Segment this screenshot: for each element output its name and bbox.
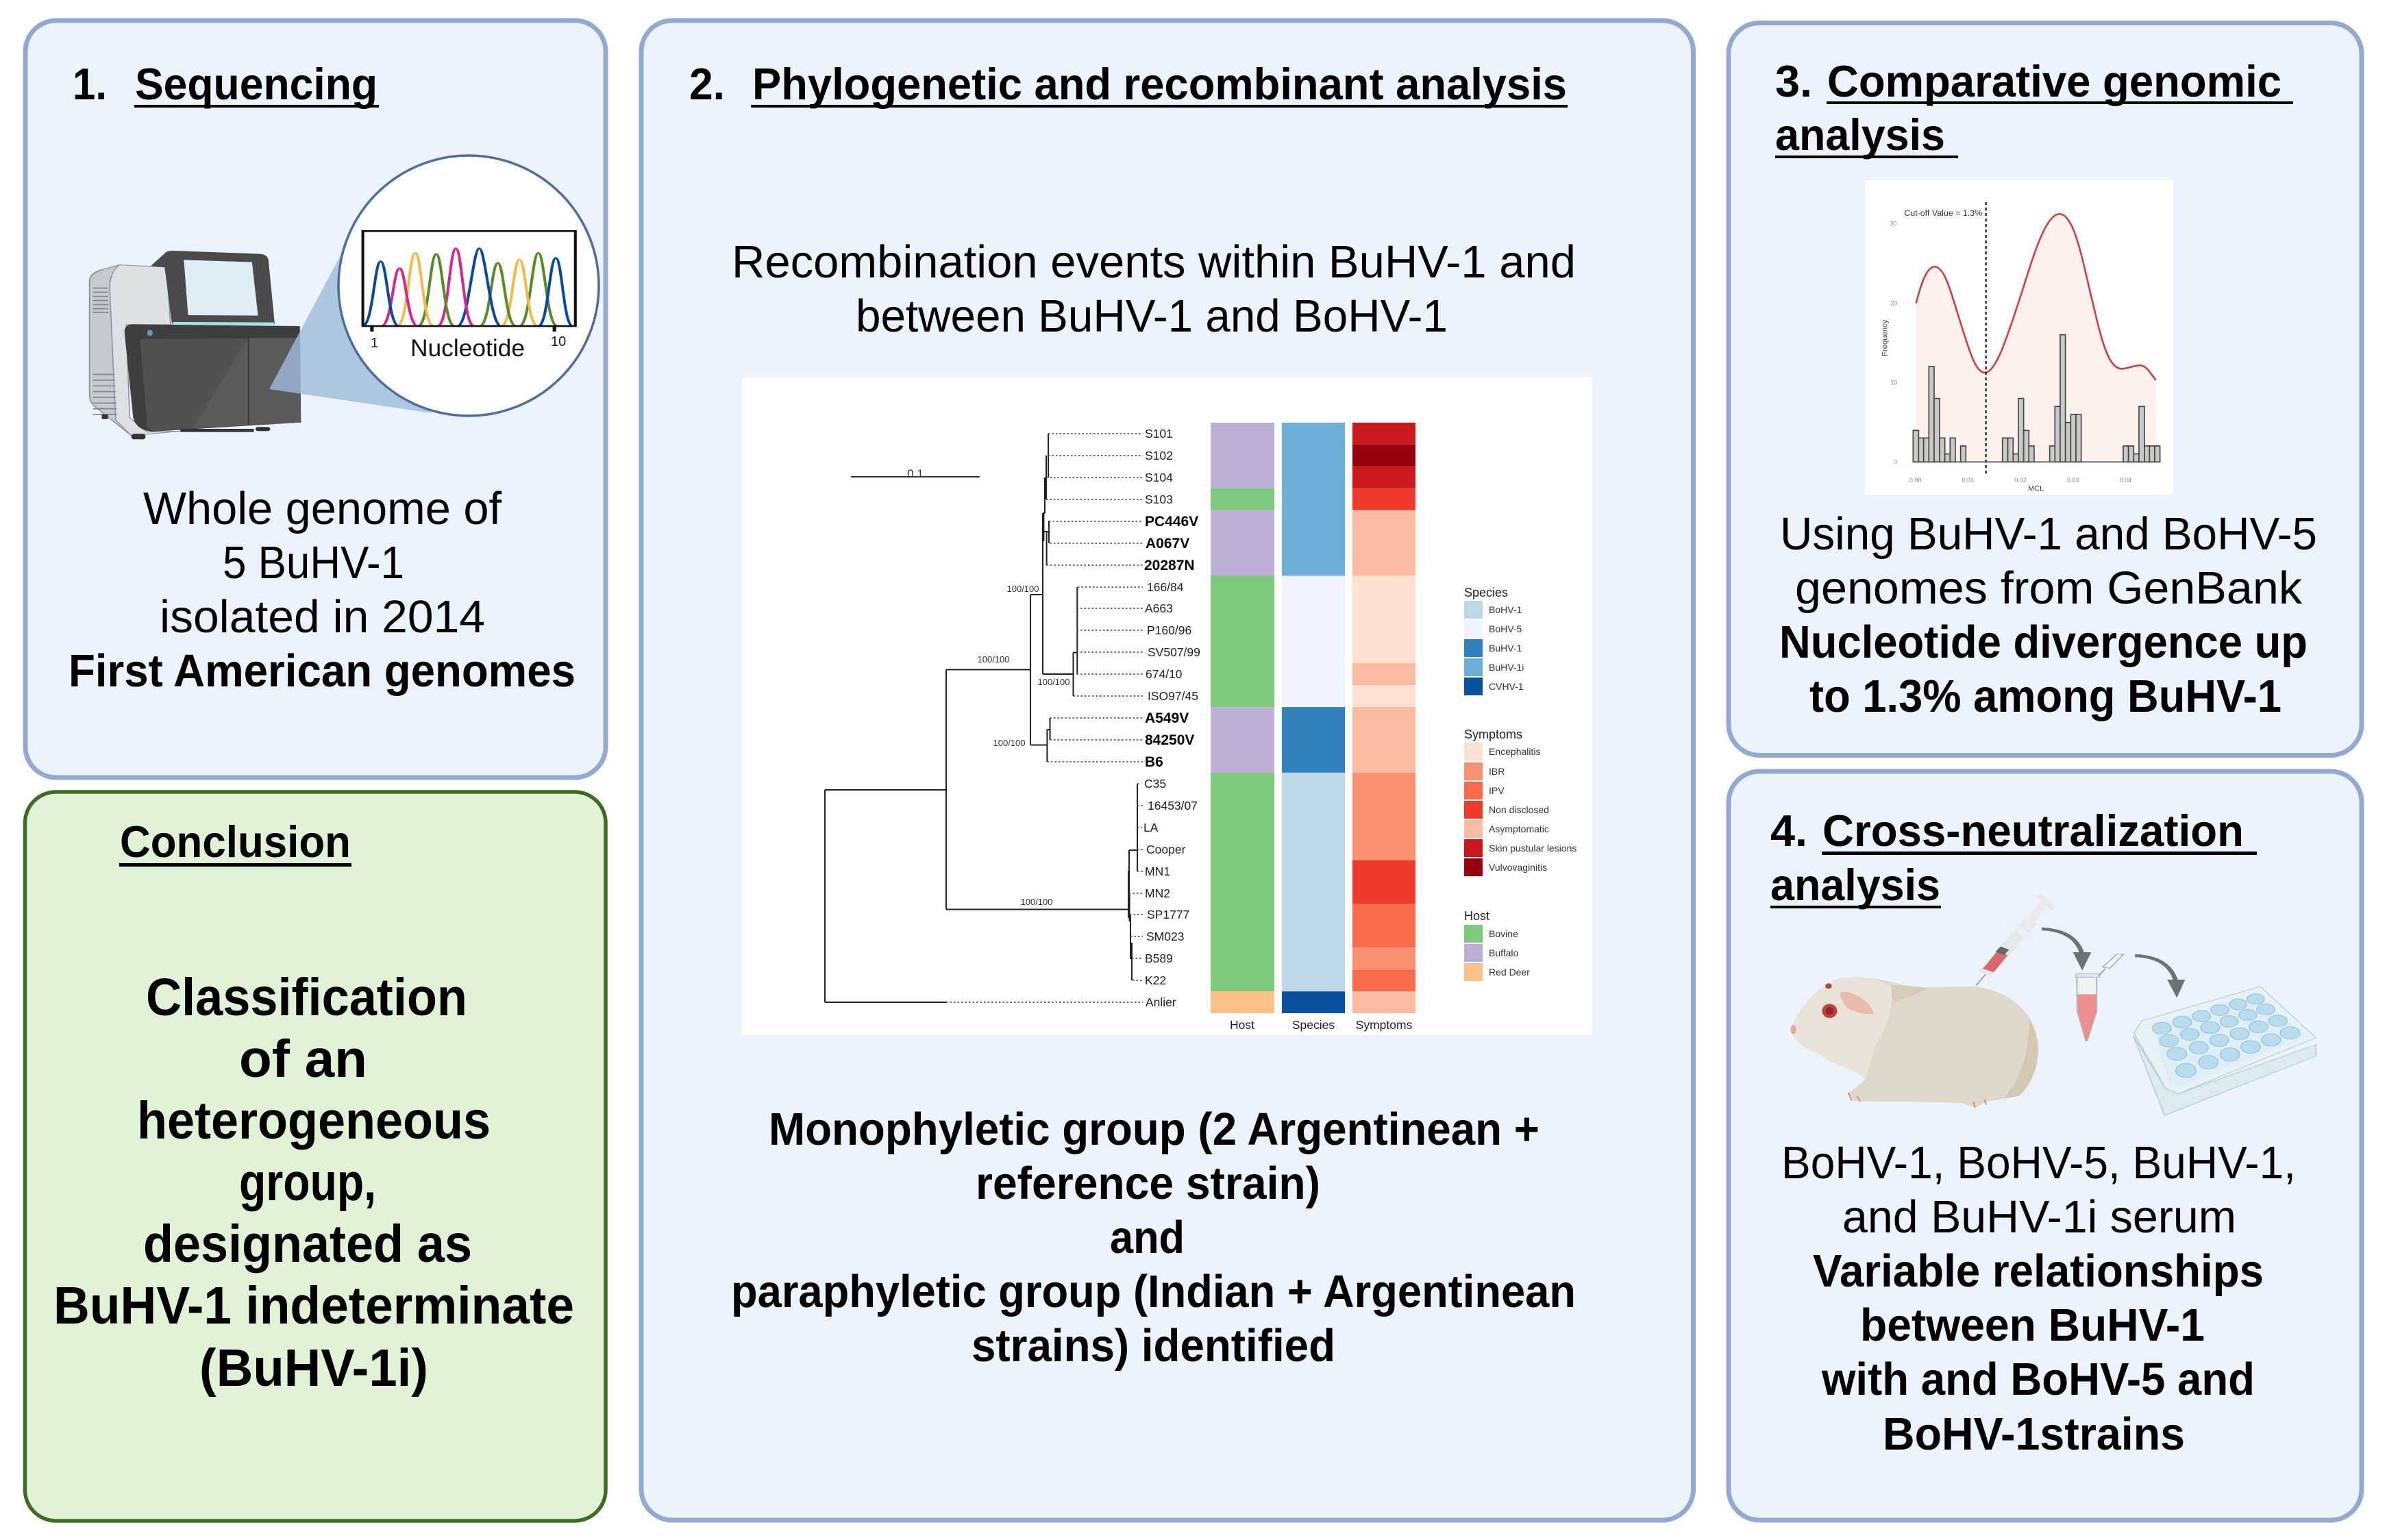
- text: cross-neutralization findings: with and BoHV-5 and: [1821, 1354, 2255, 1405]
- support values: 100/100: [1007, 584, 1039, 594]
- strain labels: S104: [1145, 471, 1173, 484]
- chart: nucleotide divergence histogram: 10: [1890, 379, 1897, 386]
- heading: sequencing: 1.: [73, 59, 107, 109]
- text: cross-neutralization findings: Variable relationships: [1813, 1245, 2264, 1297]
- strain labels: S101: [1145, 427, 1173, 440]
- legend: host: Buffalo: [1489, 947, 1519, 958]
- text: conclusion statement: group,: [239, 1153, 376, 1212]
- legend: host: Host: [1464, 909, 1489, 923]
- heading: phylogenetic: Phylogenetic and recombinant analysis: [752, 59, 1567, 109]
- text: conclusion statement: [53, 968, 574, 1398]
- text: comparative genomic findings: Nucleotide divergence up: [1779, 617, 2308, 668]
- chart: nucleotide divergence histogram: MCL: [2028, 485, 2044, 493]
- text: sequencing summary: isolated in 2014: [160, 591, 485, 643]
- text: phylogenetic conclusions: reference strain): [976, 1158, 1320, 1209]
- icon: magnifying circle with chromatogram: [269, 156, 599, 416]
- legend: symptoms: Encephalitis: [1489, 746, 1540, 757]
- strain labels: SV507/99: [1148, 645, 1200, 659]
- text: phylogenetic conclusions: Monophyletic group (2 Argentinean +: [769, 1104, 1539, 1155]
- chart: nucleotide divergence histogram: [1865, 180, 2173, 495]
- legend: host: [1464, 909, 1530, 981]
- arrow: syringe to tube: [2042, 929, 2091, 971]
- strain labels: MN2: [1145, 886, 1170, 900]
- panel: cross-neutralization analysis: [1729, 771, 2362, 1520]
- strain labels: A549V: [1145, 710, 1189, 726]
- text: recombination events: Recombination events within BuHV-1 and: [732, 236, 1576, 288]
- text: phylogenetic conclusions: and: [1110, 1212, 1185, 1263]
- heading: cross-neutralization: [1770, 806, 2257, 910]
- text: comparative genomic findings: [1779, 508, 2317, 722]
- text: cross-neutralization findings: BoHV-1strains: [1883, 1408, 2185, 1460]
- strain labels: A067V: [1146, 536, 1189, 551]
- strain labels: MN1: [1145, 865, 1170, 878]
- strain labels: ISO97/45: [1148, 689, 1198, 703]
- legend: species: BoHV-1: [1489, 604, 1522, 615]
- heatmap axis labels: Symptoms: [1356, 1018, 1413, 1032]
- strain labels: P160/96: [1147, 623, 1191, 637]
- chart: nucleotide divergence histogram: 30: [1890, 220, 1896, 227]
- heading: conclusion: Conclusion: [120, 817, 351, 867]
- strain labels: 84250V: [1145, 732, 1194, 748]
- heatmap column: host: [1211, 423, 1274, 1013]
- panel: conclusion: [25, 792, 606, 1521]
- icon: syringe: [1976, 895, 2053, 985]
- legend: symptoms: Asymptomatic: [1489, 823, 1549, 834]
- heatmap column: symptoms: [1352, 423, 1415, 1013]
- heatmap column: species: [1282, 423, 1345, 1013]
- strain labels: 166/84: [1147, 580, 1184, 594]
- chart: nucleotide divergence histogram: 0.01: [1962, 477, 1974, 484]
- strain labels: PC446V: [1145, 514, 1198, 530]
- strain labels: LA: [1143, 821, 1159, 834]
- text: conclusion statement: designated as: [143, 1215, 472, 1274]
- strain labels: Cooper: [1146, 843, 1186, 856]
- text: recombination events: [732, 236, 1576, 342]
- panel: sequencing: [25, 21, 606, 778]
- support values: 100/100: [1037, 677, 1070, 687]
- heatmap axis labels: Host: [1230, 1018, 1254, 1032]
- legend: species: CVHV-1: [1489, 681, 1524, 692]
- strain labels: [1143, 427, 1200, 1009]
- heading: cross-neutralization: 4.: [1770, 806, 1807, 856]
- strain labels: 20287N: [1144, 558, 1195, 573]
- legend: species: BoHV-5: [1489, 623, 1522, 634]
- text: cross-neutralization findings: BoHV-1, BoHV-5, BuHV-1,: [1781, 1137, 2296, 1189]
- heatmap axis labels: Species: [1292, 1018, 1335, 1032]
- legend: symptoms: IPV: [1489, 785, 1505, 796]
- strain labels: S103: [1145, 493, 1173, 506]
- strain labels: C35: [1144, 777, 1166, 791]
- text: phylogenetic conclusions: paraphyletic group (Indian + Argentinean: [731, 1266, 1576, 1317]
- text: sequencing summary: 5 BuHV-1: [223, 537, 404, 588]
- icon: magnifying circle with chromatogram: 1: [371, 336, 378, 351]
- legend: symptoms: IBR: [1489, 766, 1505, 777]
- icon: sequencing machine: [90, 251, 301, 439]
- panel: phylogenetic and recombinant analysis: [641, 21, 1694, 1520]
- text: cross-neutralization findings: [1781, 1137, 2296, 1460]
- support values: 100/100: [993, 738, 1025, 748]
- text: comparative genomic findings: Using BuHV-1 and BoHV-5: [1780, 508, 2317, 560]
- heading: comparative genomic: Comparative genomic: [1827, 56, 2281, 106]
- strain labels: S102: [1145, 449, 1173, 462]
- strain labels: 674/10: [1146, 667, 1183, 681]
- text: cross-neutralization findings: between BuHV-1: [1860, 1300, 2205, 1351]
- legend: symptoms: Vulvovaginitis: [1489, 862, 1547, 873]
- legend: host: Red Deer: [1489, 967, 1530, 978]
- strain labels: 16453/07: [1148, 799, 1198, 812]
- strain labels: Anlier: [1146, 995, 1176, 1009]
- strain labels: SP1777: [1147, 908, 1189, 921]
- text: conclusion statement: BuHV-1 indeterminate: [53, 1276, 574, 1335]
- legend: species: BuHV-1: [1489, 643, 1522, 654]
- chart: nucleotide divergence histogram: 0.00: [1909, 477, 1921, 484]
- text: cross-neutralization findings: and BuHV-1i serum: [1842, 1191, 2236, 1243]
- legend: host: Bovine: [1489, 928, 1518, 939]
- icon: guinea pig: [1790, 978, 2039, 1108]
- text: sequencing summary: First American genomes: [69, 645, 576, 697]
- chart: nucleotide divergence histogram: 20: [1890, 299, 1897, 306]
- text: conclusion statement: (BuHV-1i): [199, 1339, 428, 1398]
- text: sequencing summary: [69, 483, 576, 697]
- strain labels: SM023: [1146, 930, 1184, 943]
- icon: magnifying circle with chromatogram: Nucleotide: [410, 335, 525, 362]
- legend: symptoms: Skin pustular lesions: [1489, 843, 1576, 854]
- illustration: serum neutralization workflow: [1790, 895, 2316, 1115]
- text: comparative genomic findings: to 1.3% among BuHV-1: [1809, 671, 2281, 722]
- heading: comparative genomic: [1775, 56, 2293, 160]
- heading: sequencing: Sequencing: [135, 59, 378, 109]
- legend: symptoms: [1464, 728, 1576, 876]
- heading: cross-neutralization: analysis: [1770, 860, 1940, 910]
- text: conclusion statement: Classification: [146, 968, 467, 1027]
- text: sequencing summary: Whole genome of: [143, 483, 502, 534]
- text: recombination events: between BuHV-1 and BoHV-1: [856, 290, 1448, 342]
- heading: phylogenetic: 2.: [689, 59, 725, 109]
- support values: 100/100: [1021, 897, 1052, 907]
- legend: species: [1464, 586, 1524, 695]
- chart: phylogenetic tree with heatmap: [742, 377, 1592, 1035]
- phylogenetic tree branches: [825, 434, 1143, 1002]
- text: conclusion statement: of an: [239, 1030, 367, 1089]
- chart: nucleotide divergence histogram: 0.03: [2067, 477, 2079, 484]
- chart: nucleotide divergence histogram: 0: [1894, 458, 1897, 465]
- strain labels: B589: [1145, 952, 1173, 965]
- heading: comparative genomic: analysis: [1775, 110, 1945, 160]
- legend: species: BuHV-1i: [1489, 662, 1524, 673]
- arrow: tube to plate: [2135, 956, 2185, 998]
- heading: comparative genomic: 3.: [1775, 56, 1812, 106]
- scale bar: 0.1: [907, 467, 924, 480]
- strain labels: K22: [1145, 973, 1166, 987]
- support values: 100/100: [977, 654, 1010, 665]
- legend: symptoms: Symptoms: [1464, 728, 1522, 741]
- icon: well plate: [2133, 986, 2316, 1115]
- legend: species: Species: [1464, 586, 1508, 599]
- text: phylogenetic conclusions: [731, 1104, 1576, 1371]
- strain labels: A663: [1145, 601, 1173, 615]
- legend: symptoms: Non disclosed: [1489, 804, 1549, 815]
- chart: nucleotide divergence histogram: 0.04: [2120, 477, 2131, 484]
- panel: comparative genomic analysis: [1729, 23, 2362, 755]
- text: comparative genomic findings: genomes from GenBank: [1795, 562, 2302, 614]
- icon: serum tube: [2076, 954, 2123, 1041]
- chart: nucleotide divergence histogram: Frequency: [1881, 319, 1890, 356]
- text: conclusion statement: heterogeneous: [137, 1091, 491, 1150]
- strain labels: B6: [1145, 754, 1163, 770]
- support values: [977, 584, 1070, 907]
- chart: nucleotide divergence histogram: 0.02: [2014, 477, 2027, 484]
- text: phylogenetic conclusions: strains) identified: [972, 1320, 1335, 1371]
- chart: nucleotide divergence histogram: Cut-off Value = 1.3%: [1904, 208, 1983, 218]
- icon: magnifying circle with chromatogram: 10: [551, 334, 566, 349]
- heading: cross-neutralization: Cross-neutralization: [1822, 806, 2244, 856]
- heatmap axis labels: [1230, 1018, 1413, 1032]
